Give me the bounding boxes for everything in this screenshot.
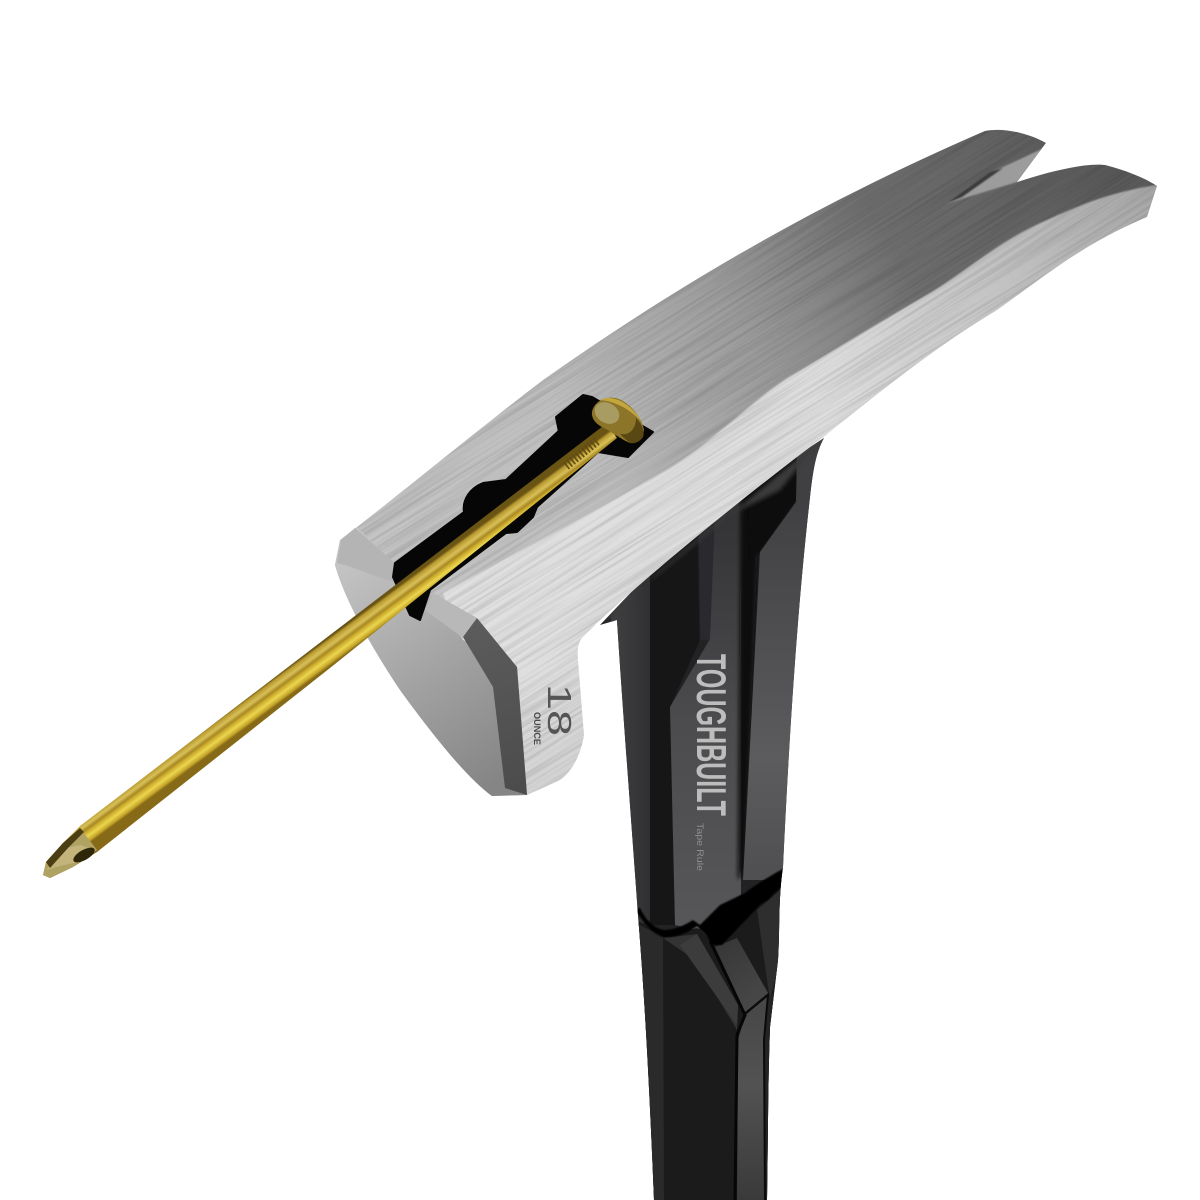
- brass nail: [43, 398, 644, 878]
- handle facet: logo panel: [670, 495, 741, 930]
- grip facet: center rib: [737, 996, 768, 1200]
- head underside shadow bevel: [605, 458, 797, 620]
- lower rubber grip: [638, 880, 782, 1200]
- grip facet: outer right strip: [765, 994, 774, 1200]
- grip rib lines: [710, 941, 745, 1200]
- grip facet: diagonal bevel: [663, 934, 738, 1030]
- handle facet: top black recess: [754, 458, 796, 556]
- claw notch dark line: [945, 168, 1003, 204]
- face chamfer top: [337, 528, 397, 582]
- nail point: [43, 828, 97, 878]
- striking face: [335, 527, 527, 796]
- grip facet: right upper facet: [757, 890, 780, 995]
- nail head dark rim: [620, 418, 644, 443]
- claw notch inner face: [945, 148, 1044, 204]
- grip facet: left strip: [638, 924, 664, 1200]
- hammer handle: [600, 430, 840, 1200]
- brushed texture: [358, 130, 1156, 791]
- handle facet: right panel: [743, 430, 830, 880]
- handle facet: left panel: [610, 576, 650, 926]
- handle base: [600, 430, 840, 1200]
- weight mark OUNCE: OUNCE: [532, 712, 542, 745]
- magnetic nail slot: [393, 395, 653, 620]
- small handle text: Tape Rule: [695, 823, 705, 871]
- nail point dark spot: [71, 845, 97, 865]
- nail point upper edge: [46, 828, 84, 868]
- logo on handle: TOUGHBUILT: [688, 654, 735, 816]
- black collar: [634, 866, 790, 945]
- dark bevel: [463, 618, 527, 795]
- handle facet: black panel: [650, 520, 700, 925]
- light lower strip: [443, 185, 1160, 700]
- neck strip: [518, 670, 584, 795]
- grip facet: center wedge: [715, 938, 768, 1012]
- handle facet: black groove: [738, 475, 757, 880]
- nail ridged threads: [566, 441, 597, 466]
- weight mark 18: 18: [541, 684, 578, 736]
- hammer head: [335, 130, 1157, 796]
- nail point facet: [46, 845, 95, 870]
- face chamfer right: [425, 593, 477, 638]
- nail shaft: [43, 423, 617, 878]
- nail head: [592, 398, 644, 443]
- claw notch gap: [1017, 120, 1090, 182]
- top surface: [335, 130, 1157, 796]
- handle facet: narrow strip: [698, 531, 714, 640]
- nail head crescent: [600, 398, 642, 422]
- nail head dome: [591, 398, 623, 428]
